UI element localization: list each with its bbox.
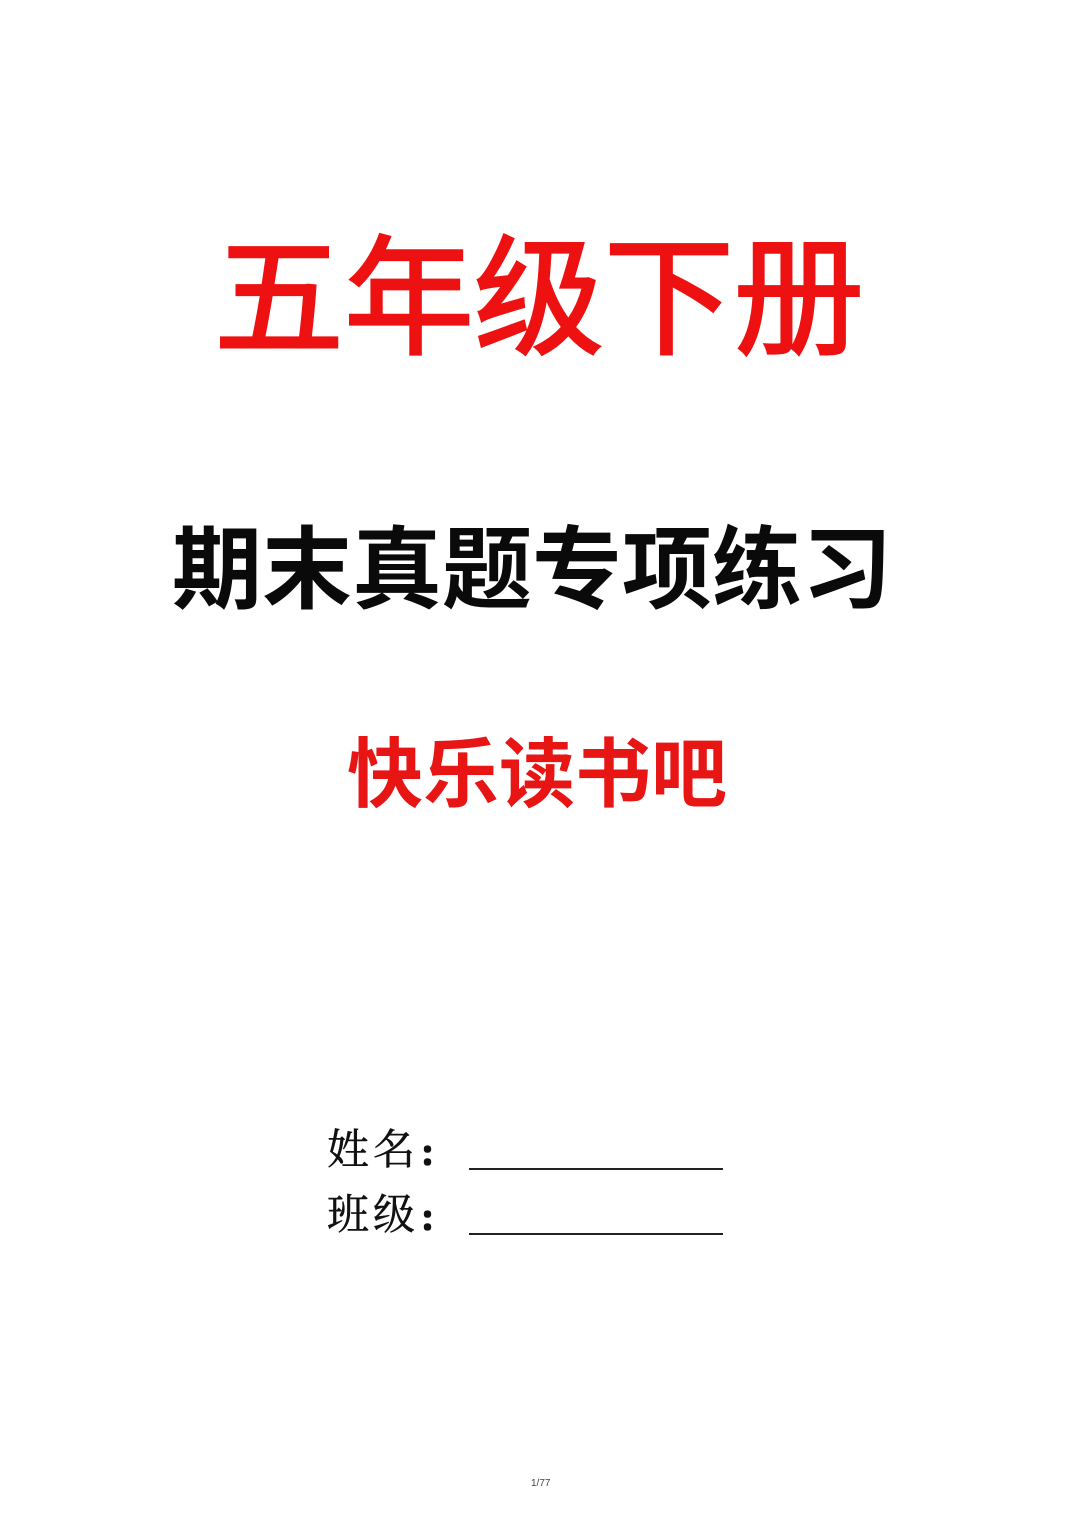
field: name: [327, 1128, 723, 1174]
field: class: [327, 1193, 723, 1239]
name label: 姓名: [327, 1128, 419, 1174]
class colon: ：: [421, 1200, 447, 1237]
class underline: [469, 1233, 723, 1235]
subtitle: final exam practice: 期末真题专项练习: [172, 521, 892, 621]
heading: happy reading: 快乐读书吧: [347, 733, 727, 818]
page number: 1/77: [531, 1478, 550, 1489]
name underline: [469, 1168, 723, 1170]
class label: 班级: [327, 1193, 419, 1239]
title: grade and volume: 五年级下册: [214, 194, 864, 382]
name colon: ：: [421, 1135, 447, 1172]
